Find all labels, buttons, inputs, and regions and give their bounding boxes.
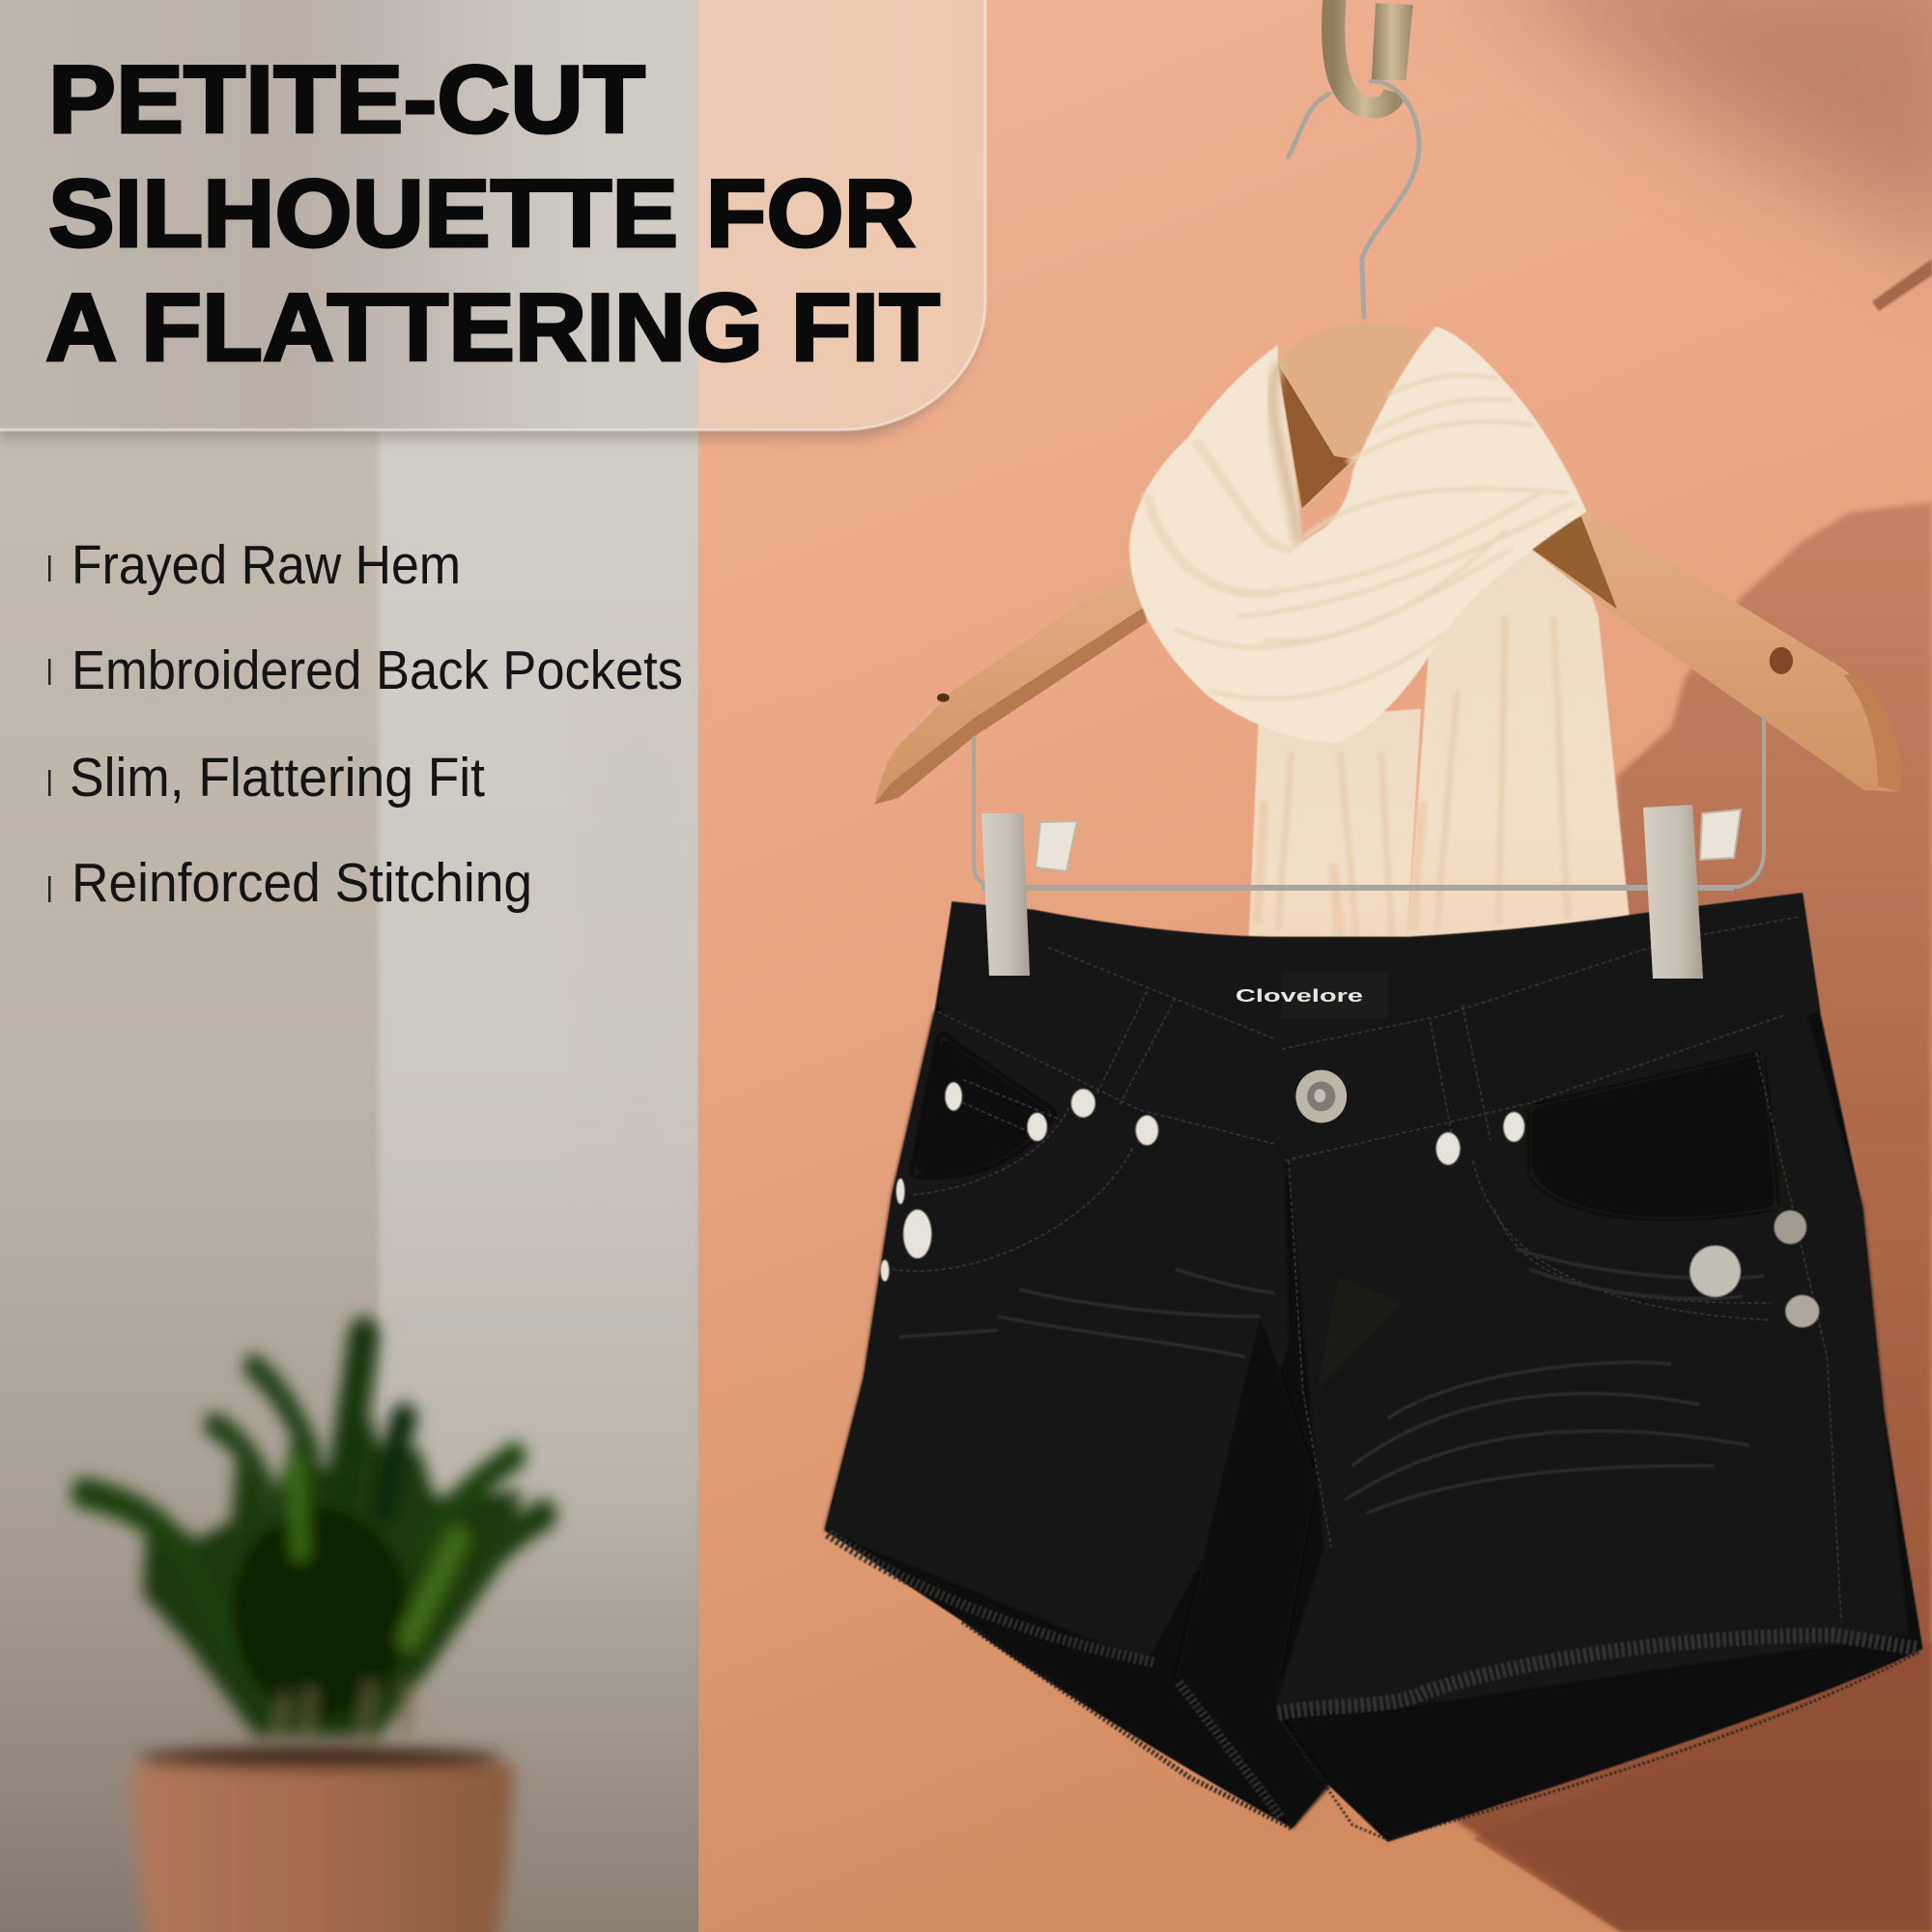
plant foliage bbox=[84, 1336, 545, 1737]
wall background bbox=[698, 0, 1932, 1932]
plant pot bbox=[130, 1764, 515, 1932]
bullet: slim flattering fit: Slim, Flattering Fit bbox=[70, 747, 485, 809]
main waist button bbox=[1295, 1070, 1347, 1122]
metal trouser clips bbox=[981, 805, 1703, 979]
icon: brass wall hook bbox=[1333, 0, 1413, 108]
scarf knot bbox=[1129, 327, 1587, 743]
hanger wire hook bbox=[1288, 81, 1419, 318]
black denim shorts bbox=[825, 894, 1922, 1842]
title: PETITE-CUT bbox=[48, 45, 645, 153]
brand label bbox=[1236, 973, 1388, 1018]
rivets bbox=[881, 1082, 1819, 1327]
hanger and scarf bbox=[874, 0, 1902, 940]
stitching and seams bbox=[892, 917, 1841, 1622]
bullet: reinforced stitching: Reinforced Stitching bbox=[71, 852, 532, 914]
title: SILHOUETTE FOR bbox=[48, 159, 916, 267]
clip tabs bbox=[1036, 810, 1741, 871]
panel: title backdrop bbox=[0, 0, 985, 440]
waistband bbox=[938, 894, 1820, 1161]
bullet: frayed raw hem: Frayed Raw Hem bbox=[71, 534, 461, 596]
soil bbox=[138, 1747, 502, 1769]
wooden hanger bbox=[874, 323, 1902, 805]
feature list bbox=[48, 534, 683, 914]
brand label: Clovelore bbox=[1236, 985, 1363, 1006]
denim wrinkles bbox=[899, 1249, 1763, 1513]
blurred potted plant bbox=[84, 1336, 545, 1932]
hanger clip rod and wires bbox=[974, 715, 1764, 888]
left background panel bbox=[0, 0, 699, 1932]
shorts silhouette bbox=[825, 894, 1922, 1842]
bullet: embroidered back pockets: Embroidered Back Pockets bbox=[71, 639, 683, 701]
title bbox=[45, 45, 940, 381]
scarf tails bbox=[1249, 524, 1630, 940]
frayed hem bbox=[828, 1533, 1919, 1840]
title: A FLATTERING FIT bbox=[45, 273, 940, 381]
front panels bbox=[825, 998, 1909, 1829]
